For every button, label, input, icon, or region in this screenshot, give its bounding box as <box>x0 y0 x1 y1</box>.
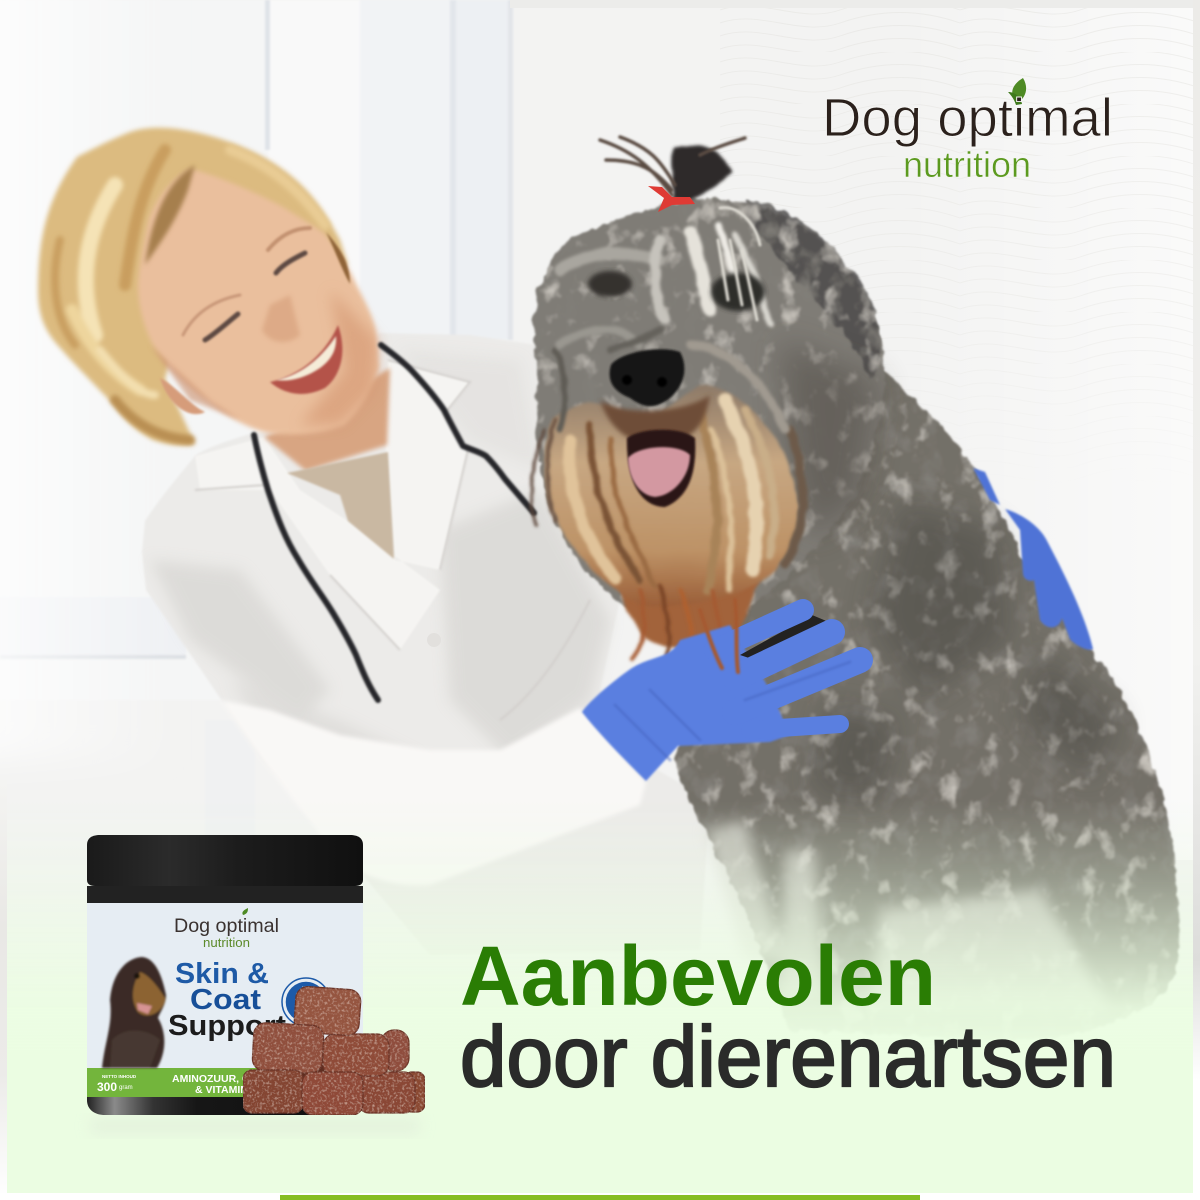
right temple hair <box>326 232 350 284</box>
right glove <box>973 468 1093 650</box>
bottom accent bar <box>280 1195 920 1200</box>
jar ingredients: & VITAMINEN <box>195 1084 262 1096</box>
jar badge: Vit <box>302 987 310 993</box>
headline <box>460 929 1116 1105</box>
coat collar <box>195 360 470 650</box>
dog mouth <box>627 430 695 507</box>
chews backing <box>290 1058 350 1078</box>
glove creases <box>615 662 850 760</box>
jar headings: Skin & <box>175 958 269 990</box>
jar logo <box>174 908 279 950</box>
dog nostrils <box>622 375 667 387</box>
coat sleeve <box>220 700 646 886</box>
body dark patches <box>810 500 1120 800</box>
face shading <box>300 290 378 425</box>
neck <box>264 368 390 471</box>
dog body <box>677 340 1179 1040</box>
eyes <box>183 228 310 340</box>
jar badge <box>282 978 330 1026</box>
right cheek shade <box>780 340 880 540</box>
green bottom panel <box>0 1060 1194 1193</box>
jar dog photo <box>102 957 166 1068</box>
dog nose <box>610 349 684 406</box>
jar logo: nutrition <box>203 935 250 950</box>
bottom green fade <box>0 800 1200 1060</box>
jar label <box>87 902 363 1072</box>
product jar <box>87 835 425 1135</box>
sweater <box>287 452 394 559</box>
dog head <box>534 199 885 628</box>
jar ingredients <box>172 1073 282 1096</box>
topknot wisps <box>600 137 745 195</box>
jar headings: Coat <box>190 984 261 1016</box>
photo: veterinarian woman <box>38 128 710 955</box>
collar lines <box>195 360 590 720</box>
chews <box>243 986 425 1115</box>
jar lid <box>87 835 363 886</box>
beard strands <box>531 400 803 675</box>
glove fingers <box>715 610 860 730</box>
jar net weight: gram <box>119 1085 133 1091</box>
ear <box>160 378 205 414</box>
smile <box>270 325 342 394</box>
brown muzzle under nose <box>600 395 710 445</box>
jar neck <box>87 886 363 903</box>
jar green band <box>87 1068 363 1097</box>
headline green: Aanbevolen <box>460 929 936 1023</box>
dog lower pale fur <box>705 820 1110 1010</box>
tan beard <box>545 385 798 606</box>
jar net weight: NETTO INHOUD <box>102 1074 137 1079</box>
topknot <box>672 145 732 200</box>
gap between fingers <box>740 615 836 665</box>
hair parting shadow <box>145 165 195 265</box>
jar base <box>87 1090 363 1115</box>
wet chin hair <box>618 580 760 675</box>
lab coat body <box>142 333 710 955</box>
coat button <box>427 633 441 647</box>
background: clinic wall <box>0 0 1193 894</box>
photo: dog <box>531 137 1179 1040</box>
headline dark: door dierenartsen <box>460 1010 1116 1105</box>
fur over fingers <box>700 600 738 672</box>
stethoscope <box>254 345 534 700</box>
jar net weight <box>97 1074 137 1094</box>
grey fringe streaks <box>555 225 785 430</box>
dog tongue <box>628 447 690 497</box>
jar logo: Dog optimal <box>174 915 279 937</box>
logo <box>822 78 1113 185</box>
ribbon <box>648 186 695 212</box>
logo sub: nutrition <box>903 144 1031 185</box>
jar headings: Support <box>168 1010 286 1042</box>
logo leaf <box>1008 78 1026 105</box>
left glove hand <box>582 600 860 781</box>
dog eyes <box>588 271 765 311</box>
jar reflection <box>90 1117 420 1135</box>
jar net weight: 300 <box>97 1080 117 1094</box>
dark ear <box>745 200 880 380</box>
jar headings <box>168 958 286 1042</box>
coat shading <box>150 350 610 780</box>
face <box>138 169 379 434</box>
jar ingredients: AMINOZUUR, OMEGA <box>172 1073 282 1085</box>
hair highlights <box>55 150 325 440</box>
fringe over eye <box>718 208 760 320</box>
hair <box>38 128 348 445</box>
logo wordmark: Dog optimal <box>822 88 1113 148</box>
